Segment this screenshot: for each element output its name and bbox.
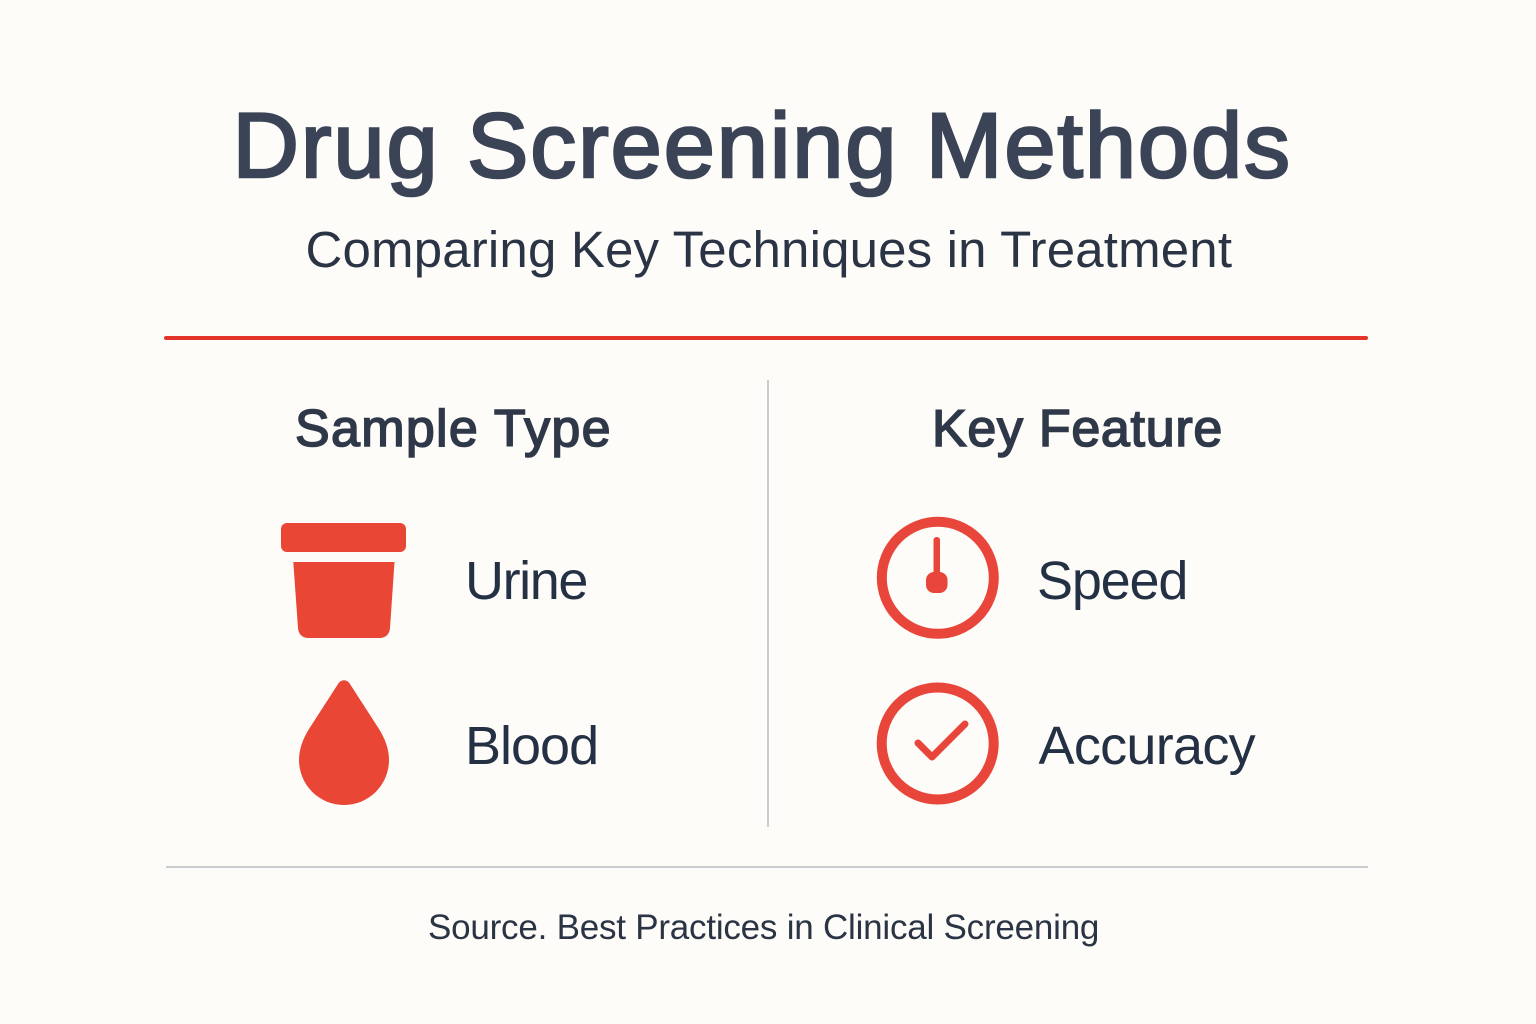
bottom divider [166,866,1368,868]
center vertical divider [767,380,769,827]
heading: sample type: Sample Type [295,400,612,458]
source note: Source. Best Practices in Clinical Screening [428,908,1099,947]
red divider [164,336,1368,340]
title: Drug Screening Methods [232,95,1292,197]
subtitle: Comparing Key Techniques in Treatment [306,221,1232,278]
heading: key feature: Key Feature [932,400,1223,458]
label: blood: Blood [465,716,598,776]
label: accuracy: Accuracy [1038,716,1255,776]
label: speed: Speed [1037,551,1187,611]
label: urine: Urine [465,551,587,611]
